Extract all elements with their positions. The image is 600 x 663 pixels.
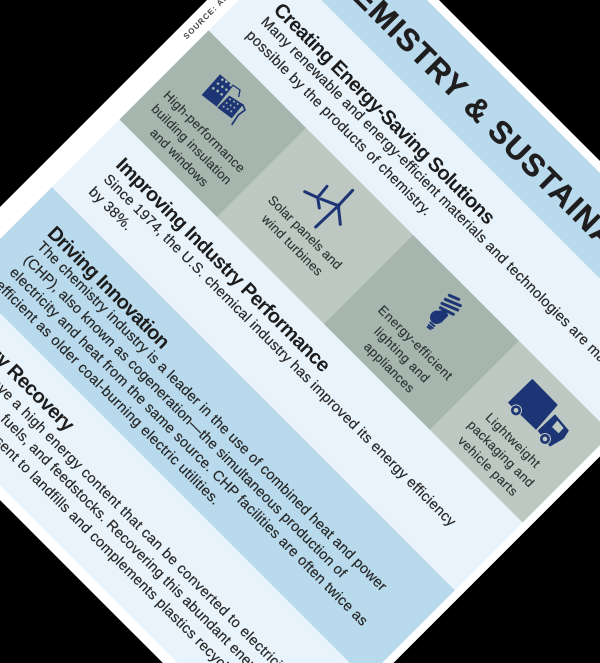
label: packaging: Lightweight <box>483 410 544 471</box>
panel: driving innovation <box>0 187 455 663</box>
icon: light bulb <box>428 295 460 329</box>
label: building insulation: and windows <box>147 125 212 190</box>
text: driving innovation: (CHP), also known as cogeneration—the simultaneous production of <box>20 252 350 582</box>
panel: energy recovery <box>0 276 366 663</box>
label: building insulation <box>135 88 248 201</box>
label: building insulation: building insulation <box>148 101 235 187</box>
label: lighting: lighting and <box>371 324 433 385</box>
panel: product cell lighting <box>324 235 519 430</box>
text: driving innovation: The chemistry industry is a leader in the use of combined heat and power <box>34 239 390 595</box>
label: solar and wind: Solar panels and <box>265 192 345 272</box>
label: lighting <box>350 302 456 409</box>
panel: product cell building insulation <box>120 30 306 217</box>
label: packaging <box>452 404 550 503</box>
icon: buildings <box>202 74 245 125</box>
text: improving industry performance: Since 1974, the U.S. chemical industry has improved its energy efficiency <box>100 171 459 531</box>
heading: driving innovation: Driving Innovation <box>43 222 174 354</box>
icon: wind turbines <box>305 186 353 227</box>
label: building insulation: High-performance <box>161 88 248 175</box>
heading: creating energy-saving solutions: Creating Energy-Saving Solutions <box>269 0 499 229</box>
heading: improving industry performance: Improving Industry Performance <box>111 154 334 377</box>
panel: product cell solar and wind <box>217 128 413 324</box>
label: lighting: appliances <box>361 339 418 396</box>
text: creating energy-saving solutions: possible by the products of chemistry. <box>243 28 434 219</box>
label: solar and wind: wind turbines <box>258 211 326 279</box>
label: lighting: Energy-efficient <box>375 302 456 383</box>
panel: product cell packaging <box>430 341 600 523</box>
icon: truck <box>509 380 568 446</box>
label: packaging: packaging and <box>465 417 537 490</box>
text: driving innovation: electricity and heat from the same source. CHP facilities are often twice as <box>6 265 371 629</box>
text: improving industry performance: by 38%. <box>85 184 135 234</box>
label: packaging: vehicle parts <box>455 433 521 499</box>
